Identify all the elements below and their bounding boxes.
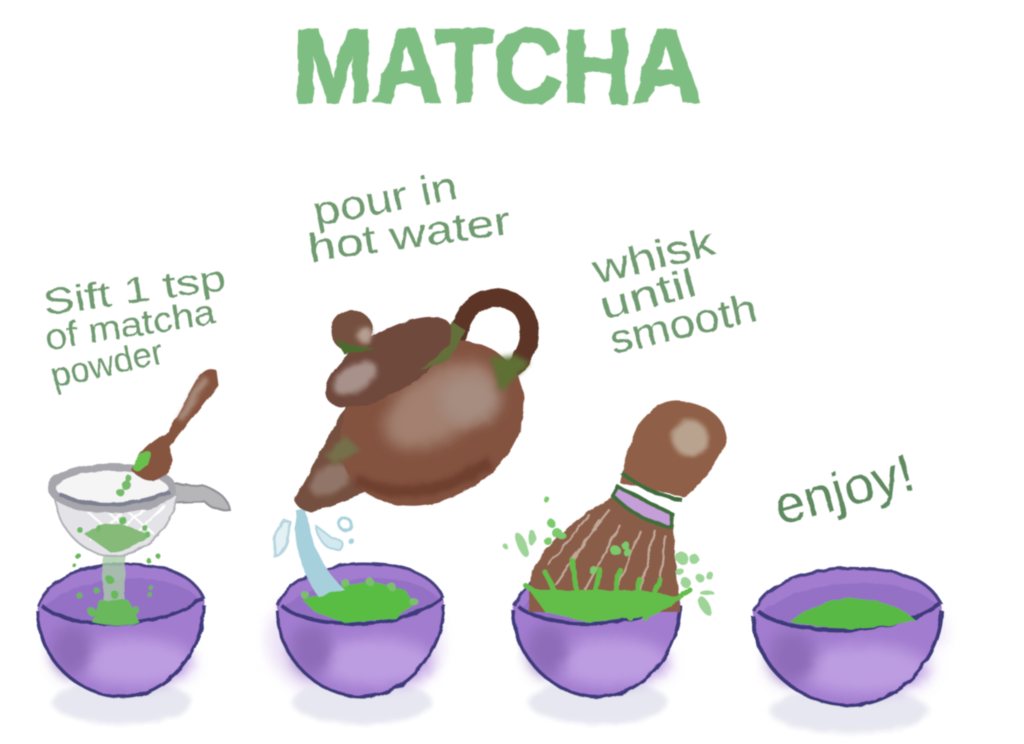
strainer basket (55, 495, 178, 556)
strainer rim (52, 467, 172, 509)
matcha surface (790, 598, 915, 629)
teapot knob (331, 310, 373, 352)
instruction: sift (40, 257, 228, 396)
title: MATCHA (293, 9, 701, 125)
spoon (131, 369, 218, 480)
powder stream (72, 553, 160, 625)
bowl 3 with whisk (502, 401, 727, 724)
instruction: sift: of matcha (42, 292, 219, 358)
instruction: whisk: until (595, 261, 701, 329)
bowl 2 with teapot (267, 298, 555, 724)
instruction: pour (305, 164, 513, 271)
whisk band (613, 487, 672, 527)
strainer handle (172, 484, 230, 510)
instruction: pour: hot water (305, 199, 513, 271)
whisk tines (528, 497, 680, 612)
instruction: pour: pour in (309, 164, 461, 235)
bowl 1 with sifter (37, 369, 230, 724)
instruction: whisk: smooth (605, 286, 761, 363)
instruction: sift: powder (47, 332, 167, 396)
green matcha (303, 582, 415, 623)
instruction: whisk (587, 220, 761, 363)
teapot body (309, 307, 555, 539)
green froth (525, 560, 690, 618)
teapot handle (456, 298, 530, 372)
whisk head (620, 401, 727, 497)
instruction: enjoy: enjoy! (768, 444, 920, 537)
instruction: sift: Sift 1 tsp (40, 257, 228, 323)
bowl 4 (753, 568, 947, 733)
teapot lid (312, 299, 466, 425)
water stream (295, 510, 345, 596)
instruction: whisk: whisk (587, 220, 721, 293)
teapot spout (294, 385, 400, 513)
